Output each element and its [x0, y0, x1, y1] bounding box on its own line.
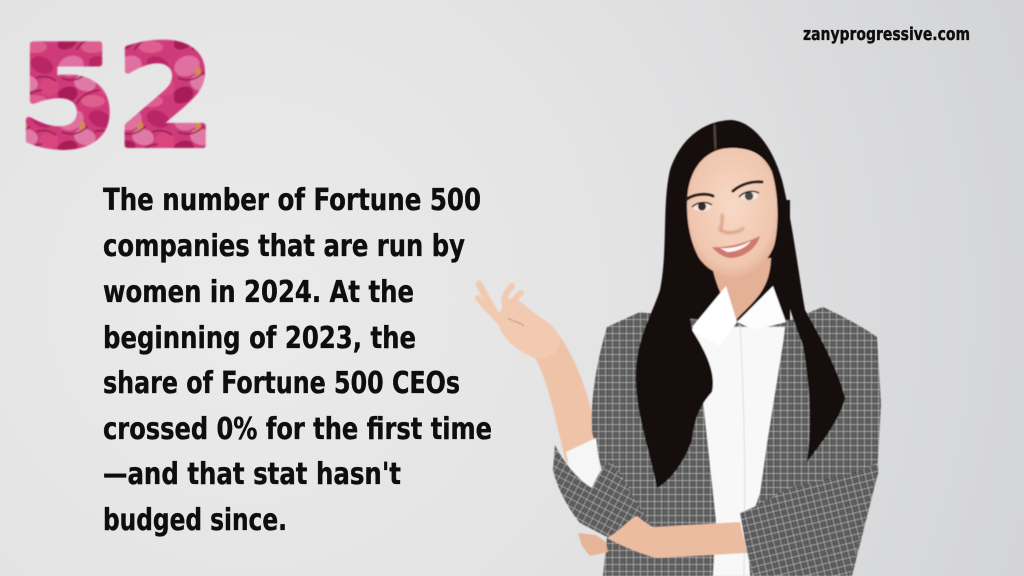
neck — [711, 258, 771, 320]
left sleeve — [553, 445, 650, 537]
description text block: beginning of 2023, the — [103, 321, 416, 356]
description text block: —and that stat hasn't — [103, 457, 401, 492]
description text block — [103, 183, 492, 538]
right sleeve — [740, 463, 879, 576]
shirt placket — [740, 325, 745, 576]
hair parting — [714, 124, 716, 150]
description text block: women in 2024. At the — [103, 275, 414, 310]
description text block: crossed 0% for the first time — [103, 412, 492, 447]
white shirt — [693, 327, 785, 576]
face — [687, 148, 778, 277]
big number made of pink petals: 52 — [18, 17, 215, 178]
description text block: budged since. — [103, 503, 287, 538]
right hair — [731, 120, 845, 462]
shirt collar — [692, 286, 786, 346]
description text block: The number of Fortune 500 — [103, 183, 481, 218]
website label: zanyprogressive.com — [803, 24, 970, 45]
smile — [712, 236, 760, 258]
left eye — [692, 202, 712, 211]
description text block: share of Fortune 500 CEOs — [103, 366, 460, 401]
blazer body — [592, 307, 881, 576]
left hair — [636, 120, 731, 488]
shirt cuff — [566, 438, 600, 490]
woman in plaid blazer — [478, 120, 881, 576]
back of hair behind neck — [684, 200, 790, 330]
raised arm and hand — [478, 284, 598, 462]
description text block: companies that are run by — [103, 229, 465, 264]
folded forearm and hidden hand — [578, 516, 747, 558]
right eye — [739, 191, 759, 200]
